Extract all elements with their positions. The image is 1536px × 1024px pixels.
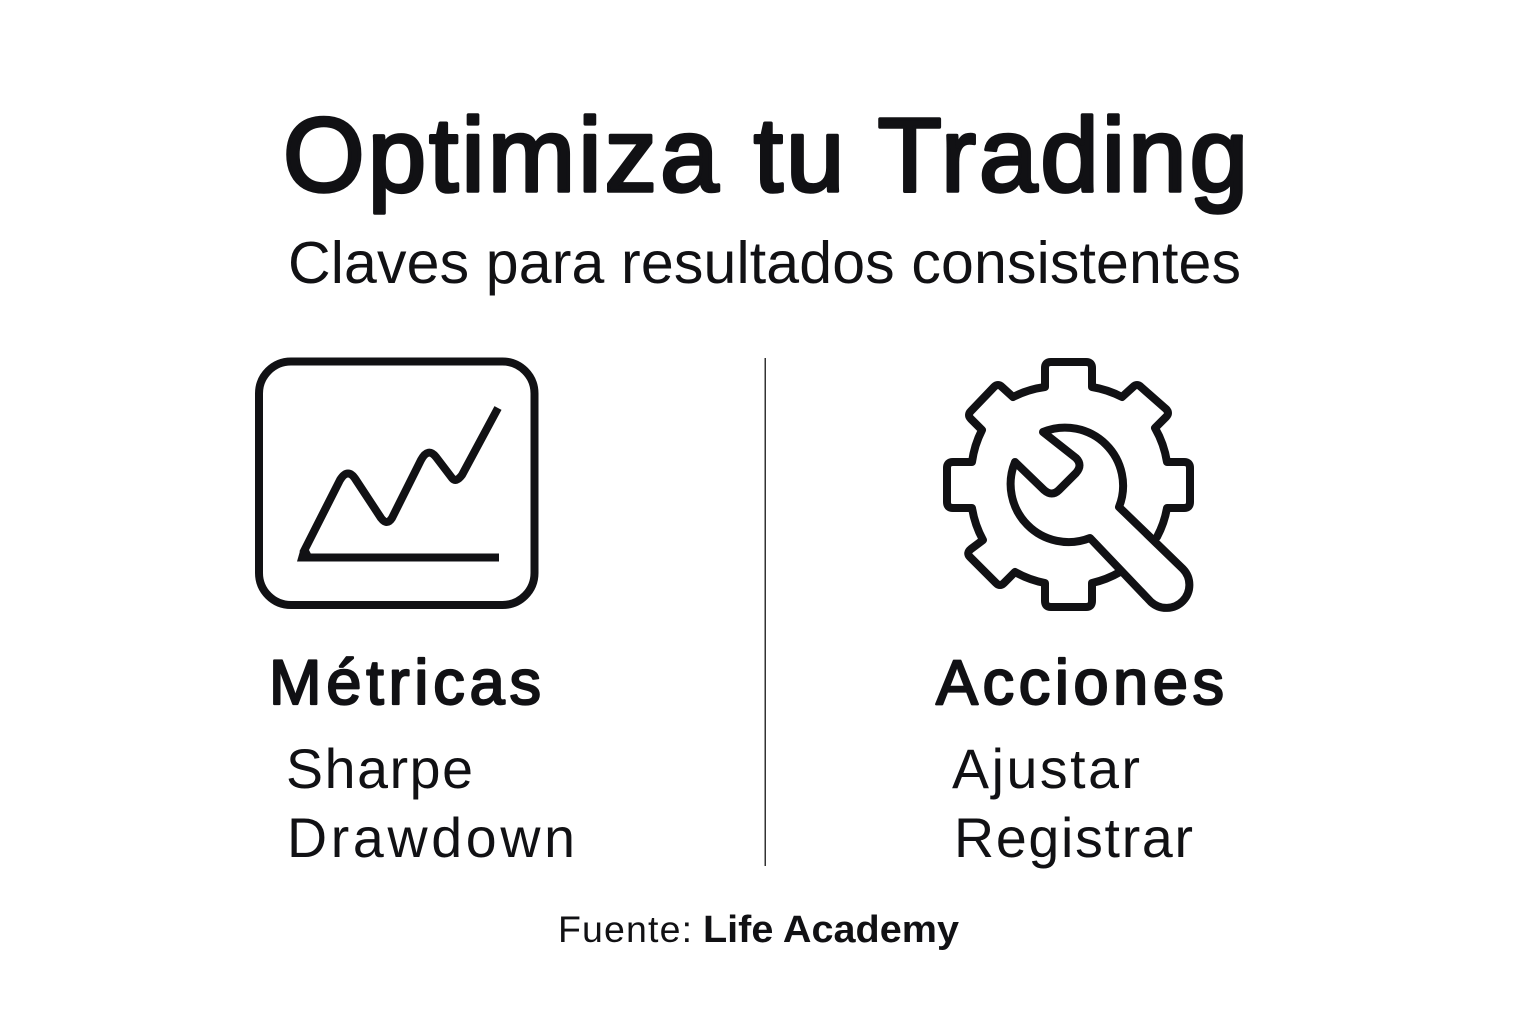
panel: acciones <box>936 362 1224 869</box>
item: Registrar: Registrar <box>954 807 1193 869</box>
vertical divider <box>764 358 766 866</box>
panel: métricas <box>259 362 575 869</box>
item: Ajustar: Ajustar <box>952 738 1140 800</box>
icon: line chart in rounded frame <box>259 362 534 605</box>
subtitle: Claves para resultados consistentes <box>288 230 1241 296</box>
source line: Life Academy <box>703 909 959 951</box>
heading: Acciones: Acciones <box>936 648 1224 718</box>
item: Drawdown: Drawdown <box>287 807 575 869</box>
title: Optimiza tu Trading <box>283 97 1248 214</box>
item: Sharpe: Sharpe <box>286 738 473 800</box>
icon: gear with wrench <box>947 362 1190 608</box>
heading: Métricas: Métricas <box>269 648 541 718</box>
source line: Fuente: <box>558 908 692 950</box>
source line <box>558 908 959 951</box>
icon detail: chart corner wedge <box>297 544 311 562</box>
